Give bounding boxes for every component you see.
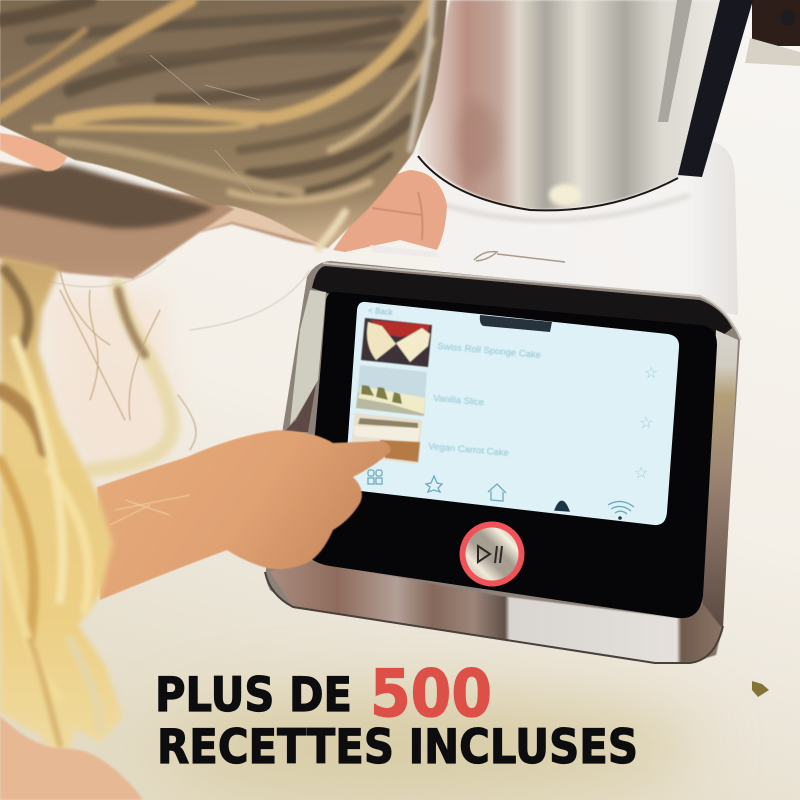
- recipe label 3: Vegan Carrot Cake: [428, 441, 509, 459]
- paper edge: [370, 245, 440, 258]
- recipe label 1: Swiss Roll Sponge Cake: [437, 341, 541, 361]
- jar black handle: [678, 0, 753, 177]
- black panel: [305, 292, 717, 618]
- title line 2: RECETTES INCLUSES: [157, 720, 638, 775]
- chrome lower band: [270, 560, 722, 664]
- background counter top right: [745, 0, 800, 66]
- jar base edge: [418, 156, 678, 210]
- back link: < Back: [368, 306, 394, 317]
- jar inner strip: [658, 0, 692, 122]
- chrome left strip: [284, 290, 326, 432]
- recipe label 2: Vanilla Slice: [433, 393, 485, 408]
- status notch: [480, 315, 552, 332]
- start stop button: [460, 522, 524, 586]
- child's arm and hand: [97, 430, 390, 600]
- neck tint: [200, 205, 340, 248]
- title line 1: PLUS DE: [155, 668, 352, 723]
- navigation icons: [368, 470, 634, 520]
- ear: [0, 133, 67, 171]
- appliance base: [400, 140, 738, 315]
- control panel top band: [312, 266, 732, 340]
- hair under layer: [0, 165, 215, 229]
- hair strands on arm: [110, 495, 190, 525]
- brand logo: [474, 252, 565, 262]
- shoulder: [0, 716, 143, 800]
- child's fingers on top of base: [333, 170, 447, 258]
- base shadow arc: [445, 195, 690, 220]
- title: [155, 657, 638, 775]
- recipe thumbnail 2: [356, 365, 427, 416]
- favourite stars: ☆: [639, 415, 653, 432]
- top hair mass: [0, 0, 447, 248]
- touch screen: [345, 302, 679, 525]
- hair under layer and neck: [0, 160, 328, 279]
- favourite stars: [634, 365, 658, 482]
- stainless steel jar: [418, 0, 722, 210]
- fine hair flyaways: [150, 55, 260, 200]
- crumb on table: [752, 681, 769, 697]
- chrome highlight line: [323, 263, 741, 340]
- blond strand shading: [0, 270, 100, 745]
- highlighted number: 500: [370, 657, 492, 732]
- chrome right side: [702, 330, 738, 628]
- recipe thumbnail 1: [361, 318, 432, 367]
- long blond hair: [0, 255, 123, 772]
- favourite stars: ☆: [644, 365, 658, 382]
- hair veil over table: [40, 290, 175, 485]
- control panel outer shell: [266, 261, 740, 664]
- favourite stars: ☆: [634, 465, 648, 482]
- table shading near text: [160, 695, 700, 795]
- loose hair strand group: [0, 260, 310, 470]
- chrome bottom edge: [265, 572, 723, 663]
- recipe thumbnail 3: [350, 413, 422, 464]
- hair strands: [0, 0, 432, 248]
